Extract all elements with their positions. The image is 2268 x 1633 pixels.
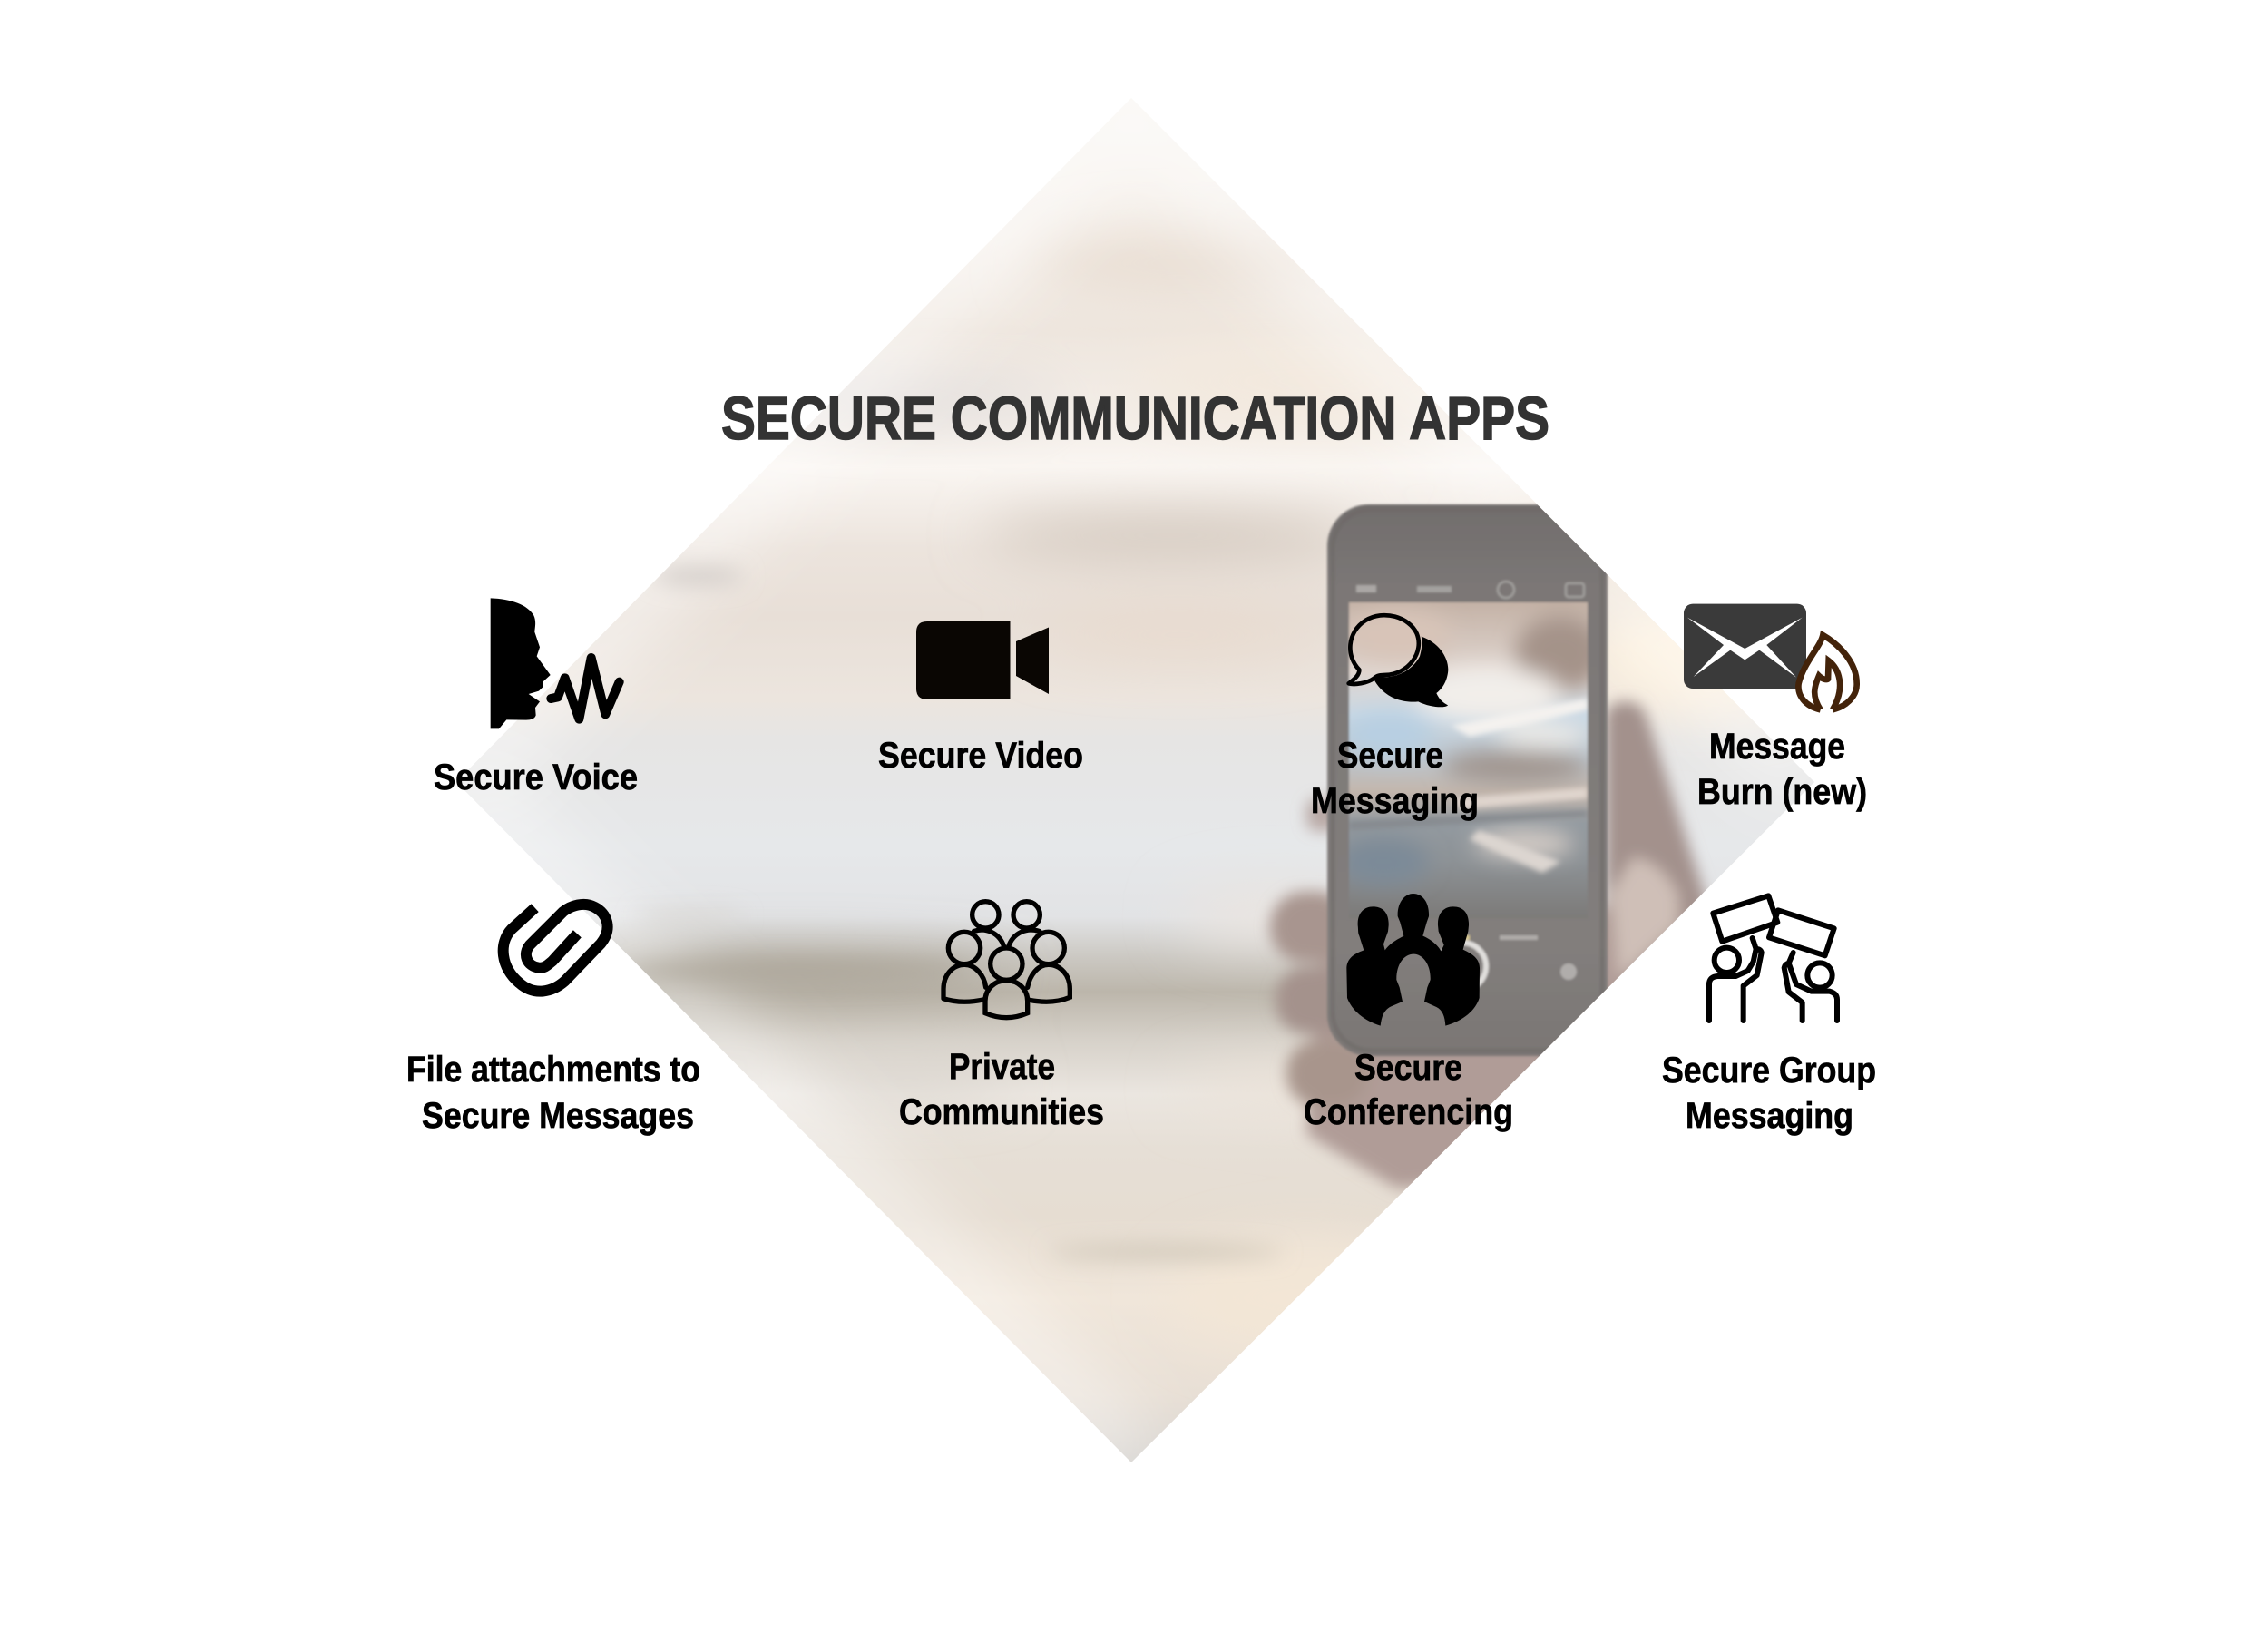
icon: video camera (916, 621, 1049, 699)
label line 2: Messaging (1311, 781, 1479, 821)
label line 2: Messaging (1686, 1096, 1853, 1136)
phone body (1327, 504, 1608, 1056)
phone screen (1347, 601, 1589, 898)
label: Secure Video (878, 736, 1083, 776)
icon: two people holding up signs (1709, 895, 1837, 1021)
hand holding the phone (1270, 701, 1778, 1188)
feature: File attachments (406, 905, 700, 1136)
feature: Private Communities (899, 902, 1104, 1132)
label: Secure Voice (434, 758, 638, 797)
label line 2: Communities (899, 1092, 1104, 1132)
feature: Message Burn (1684, 604, 1867, 812)
label line 1: Secure (1337, 736, 1443, 776)
background: soft pale fade along the diamond edges (486, 207, 1787, 763)
label line 2: Secure Messages (422, 1096, 694, 1136)
background: sky and sea gradient (454, 91, 1823, 1474)
icon: paperclip (503, 905, 608, 992)
icon: group of five people outlines (943, 902, 1070, 1018)
label line 1: Secure Group (1662, 1051, 1876, 1090)
icon: envelope with flame (1684, 604, 1857, 709)
label line 1: File attachments to (406, 1050, 700, 1090)
feature: Secure Voice (434, 598, 638, 797)
background: blurred clouds and shoreline (622, 220, 1713, 1315)
label line 1: Private (949, 1047, 1055, 1087)
feature: Secure Conferencing (1304, 894, 1513, 1132)
phone camera controls (1356, 582, 1584, 990)
background: pale fade along the lower left edge (513, 836, 1139, 1462)
feature: Secure Video (878, 621, 1083, 776)
feature: Secure Messaging (1311, 615, 1479, 821)
icon: speaking face with sound wave (491, 598, 620, 728)
label line 2: Burn (new) (1697, 772, 1867, 812)
feature: Secure Group Messaging (1662, 895, 1876, 1136)
panel: diamond photo of a phone held up at the seaside (454, 91, 1823, 1474)
label line 2: Conferencing (1304, 1092, 1513, 1132)
icon: silhouettes of conference participants (1346, 894, 1480, 1026)
icon: speech bubbles (1349, 615, 1448, 707)
label line 1: Message (1709, 727, 1845, 767)
title: SECURE COMMUNICATION APPS (721, 385, 1549, 453)
background: dark band on the water (626, 567, 1284, 1258)
label line 1: Secure (1354, 1048, 1462, 1088)
